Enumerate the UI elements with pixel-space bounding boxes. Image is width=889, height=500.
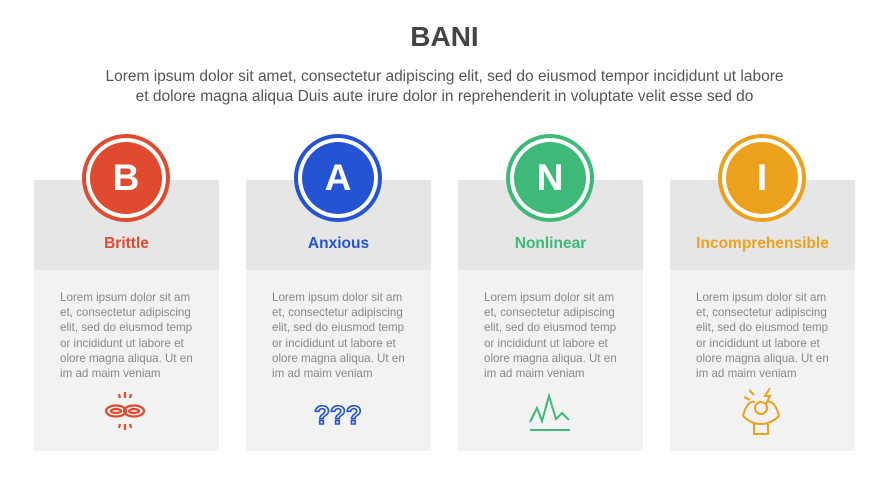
panel: nonlinear: [458, 134, 643, 451]
text: incomprehensible: or incididunt ut labore et: [696, 337, 820, 350]
text: brittle: im ad maim veniam: [60, 367, 161, 380]
text: incomprehensible: im ad maim veniam: [696, 367, 797, 380]
text: brittle: or incididunt ut labore et: [60, 337, 184, 350]
subtitle: et dolore magna aliqua Duis aute irure dolor in reprehenderit in voluptate velit esse sed do: [136, 88, 753, 105]
icon: A circle: A: [325, 157, 351, 198]
panel: brittle: [34, 134, 219, 451]
icon: N circle: [506, 134, 594, 222]
panel: incomprehensible: [670, 134, 855, 451]
text: anxious: im ad maim veniam: [272, 367, 373, 380]
text: nonlinear: elit, sed do eiusmod temp: [484, 321, 616, 334]
icon: I circle: [718, 134, 806, 222]
icon: zigzag chart: [529, 392, 570, 431]
text: anxious: [272, 291, 405, 380]
icon: question marks: ???: [314, 400, 362, 430]
icon: broken chain: [104, 392, 146, 430]
icon: N circle: N: [537, 157, 563, 198]
text: nonlinear: or incididunt ut labore et: [484, 337, 608, 350]
text: anxious: or incididunt ut labore et: [272, 337, 396, 350]
text: incomprehensible: Lorem ipsum dolor sit am: [696, 291, 826, 304]
text: anxious: olore magna aliqua. Ut en: [272, 352, 405, 365]
subtitle: [105, 68, 784, 105]
text: anxious: Lorem ipsum dolor sit am: [272, 291, 402, 304]
icon: stressed person: [742, 388, 780, 435]
text: nonlinear: et, consectetur adipiscing: [484, 306, 615, 319]
text: nonlinear: Lorem ipsum dolor sit am: [484, 291, 614, 304]
icon: A circle: [294, 134, 382, 222]
heading: Incomprehensible: Incomprehensible: [696, 235, 829, 252]
heading: Nonlinear: Nonlinear: [515, 235, 586, 252]
title: BANI: [410, 21, 479, 52]
icon: I circle: I: [757, 157, 767, 198]
icon: B circle: [82, 134, 170, 222]
text: incomprehensible: olore magna aliqua. Ut en: [696, 352, 829, 365]
text: nonlinear: im ad maim veniam: [484, 367, 585, 380]
text: nonlinear: olore magna aliqua. Ut en: [484, 352, 617, 365]
text: incomprehensible: [696, 291, 829, 380]
subtitle: Lorem ipsum dolor sit amet, consectetur adipiscing elit, sed do eiusmod tempor incididunt ut labore: [105, 68, 784, 85]
text: brittle: Lorem ipsum dolor sit am: [60, 291, 190, 304]
text: anxious: elit, sed do eiusmod temp: [272, 321, 404, 334]
text: brittle: olore magna aliqua. Ut en: [60, 352, 193, 365]
text: incomprehensible: elit, sed do eiusmod temp: [696, 321, 828, 334]
text: nonlinear: [484, 291, 617, 380]
heading: Brittle: Brittle: [104, 235, 149, 252]
text: brittle: et, consectetur adipiscing: [60, 306, 191, 319]
panel: anxious: [246, 134, 431, 451]
text: anxious: et, consectetur adipiscing: [272, 306, 403, 319]
text: brittle: [60, 291, 193, 380]
heading: Anxious: Anxious: [308, 235, 369, 252]
text: incomprehensible: et, consectetur adipiscing: [696, 306, 827, 319]
icon: B circle: B: [113, 157, 139, 198]
text: brittle: elit, sed do eiusmod temp: [60, 321, 192, 334]
